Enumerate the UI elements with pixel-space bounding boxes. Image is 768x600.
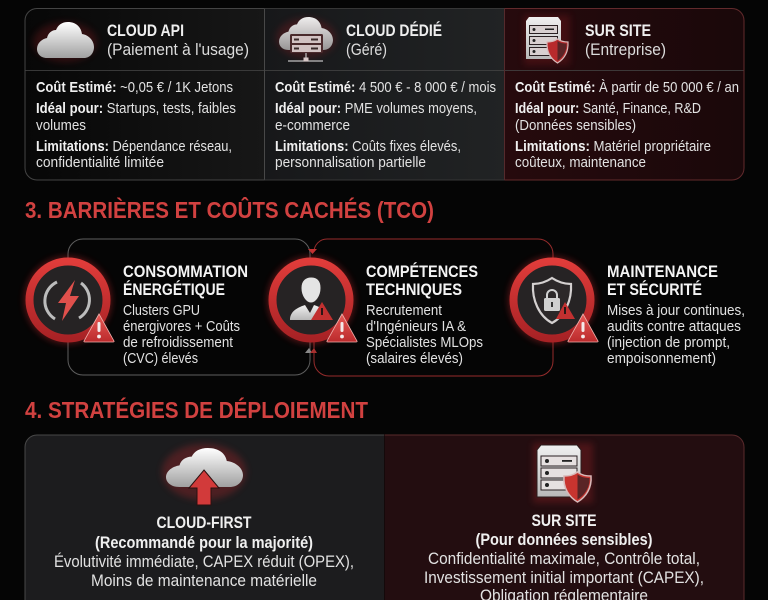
text: maintenance and security: audits contre attaques xyxy=(607,318,741,335)
text: technical skills: (salaires élevés) xyxy=(366,350,463,367)
barrier: energy consumption xyxy=(24,256,248,367)
details: on-site: Coût Estimé: À partir de 50 000 € / an xyxy=(515,79,739,96)
text: on-site strategy: Investissement initial important (CAPEX), xyxy=(424,568,704,587)
text: energy consumption: Clusters GPU xyxy=(123,302,200,319)
arrow: red head xyxy=(308,249,317,254)
title: dedicated cloud: (Géré) xyxy=(346,40,387,59)
text: energy consumption: CONSOMMATION xyxy=(123,262,248,281)
text: technical skills: d'Ingénieurs IA & xyxy=(366,318,466,335)
text: energy consumption xyxy=(123,262,248,367)
details: cloud API: Coût Estimé: ~0,05 € / 1K Jetons xyxy=(36,79,233,96)
text: on-site strategy: (Pour données sensibles) xyxy=(476,531,652,549)
icon: person ring xyxy=(268,256,354,344)
column: on-site xyxy=(504,8,744,180)
text: energy consumption: (CVC) élevés xyxy=(123,350,198,367)
icon: shield ring xyxy=(508,256,596,344)
details: cloud API xyxy=(36,79,236,171)
arrow: small double head xyxy=(305,348,317,353)
text: on-site strategy: SUR SITE xyxy=(532,512,596,530)
details: on-site: Idéal pour: Santé, Finance, R&D xyxy=(515,100,701,117)
text: cloud-first: CLOUD-FIRST xyxy=(156,514,252,532)
details: dedicated cloud xyxy=(275,79,496,171)
details: cloud API: Idéal pour: Startups, tests, faibles xyxy=(36,100,236,117)
details: cloud API: confidentialité limitée xyxy=(36,154,164,171)
icon: cloud xyxy=(33,22,97,62)
details: dedicated cloud: Idéal pour: PME volumes moyens, xyxy=(275,100,477,117)
icon: server with shield xyxy=(533,443,593,503)
text: energy consumption: de refroidissement xyxy=(123,334,234,351)
details: on-site: coûteux, maintenance xyxy=(515,154,646,171)
text: on-site strategy: Confidentialité maximale, Contrôle total, xyxy=(428,549,700,568)
barrier: maintenance and security xyxy=(508,256,745,367)
details: cloud API: Limitations: Dépendance réseau, xyxy=(36,138,232,155)
text: technical skills xyxy=(366,262,483,367)
title: dedicated cloud xyxy=(346,21,442,59)
details: dedicated cloud: personnalisation partielle xyxy=(275,154,426,171)
connector: red loop xyxy=(314,239,553,376)
icon: cloud with up arrow xyxy=(162,444,246,505)
panel: hosting comparison table xyxy=(25,8,744,180)
text: maintenance and security xyxy=(607,262,745,367)
icon: warning triangle xyxy=(568,314,598,342)
text: cloud-first: Évolutivité immédiate, CAPEX réduit (OPEX), xyxy=(54,552,354,571)
icon: server with shield xyxy=(524,15,570,65)
title: on-site: SUR SITE xyxy=(585,21,651,40)
title: cloud API: CLOUD API xyxy=(107,21,184,40)
title: cloud API: (Paiement à l'usage) xyxy=(107,40,249,59)
icon: energy ring xyxy=(24,256,112,344)
title: dedicated cloud: CLOUD DÉDIÉ xyxy=(346,21,442,40)
connector: grey loop xyxy=(68,239,310,375)
icon: cloud with server xyxy=(276,17,336,62)
text: maintenance and security: MAINTENANCE xyxy=(607,262,718,281)
title: on-site: (Entreprise) xyxy=(585,40,666,59)
icon: warning triangle xyxy=(327,314,357,342)
text: on-site strategy xyxy=(424,512,704,600)
barrier: technical skills xyxy=(268,256,483,367)
icon: warning triangle xyxy=(84,314,114,342)
text: maintenance and security: (injection de prompt, xyxy=(607,334,730,351)
text: technical skills: TECHNIQUES xyxy=(366,280,462,299)
text: cloud-first xyxy=(54,514,354,590)
details: on-site xyxy=(515,79,739,171)
text: technical skills: COMPÉTENCES xyxy=(366,262,478,281)
title: cloud API xyxy=(107,21,249,59)
column: cloud API xyxy=(25,8,264,180)
text: technical skills: Spécialistes MLOps xyxy=(366,334,483,351)
panel: cloud-first strategy xyxy=(25,435,384,600)
details: on-site: Limitations: Matériel propriétaire xyxy=(515,138,711,155)
text: maintenance and security: empoisonnement) xyxy=(607,350,716,367)
details: on-site: (Données sensibles) xyxy=(515,117,636,134)
text: technical skills: Recrutement xyxy=(366,302,443,319)
details: dedicated cloud: e-commerce xyxy=(275,117,350,134)
text: energy consumption: énergivores + Coûts xyxy=(123,318,240,335)
text: maintenance and security: ET SÉCURITÉ xyxy=(607,280,702,299)
text: cloud-first: (Recommandé pour la majorité) xyxy=(95,534,313,552)
panel: on-site strategy xyxy=(384,435,744,600)
column: dedicated cloud xyxy=(264,8,504,180)
text: cloud-first: Moins de maintenance matérielle xyxy=(91,571,317,590)
title: on-site xyxy=(585,21,666,59)
details: cloud API: volumes xyxy=(36,117,86,134)
heading: section 3: 3. BARRIÈRES ET COÛTS CACHÉS (TCO) xyxy=(25,196,434,223)
heading: section 4: 4. STRATÉGIES DE DÉPLOIEMENT xyxy=(25,396,369,423)
details: dedicated cloud: Coût Estimé: 4 500 € - 8 000 € / mois xyxy=(275,79,496,96)
text: energy consumption: ÉNERGÉTIQUE xyxy=(123,280,225,299)
details: dedicated cloud: Limitations: Coûts fixes élevés, xyxy=(275,138,461,155)
text: maintenance and security: Mises à jour continues, xyxy=(607,302,745,319)
